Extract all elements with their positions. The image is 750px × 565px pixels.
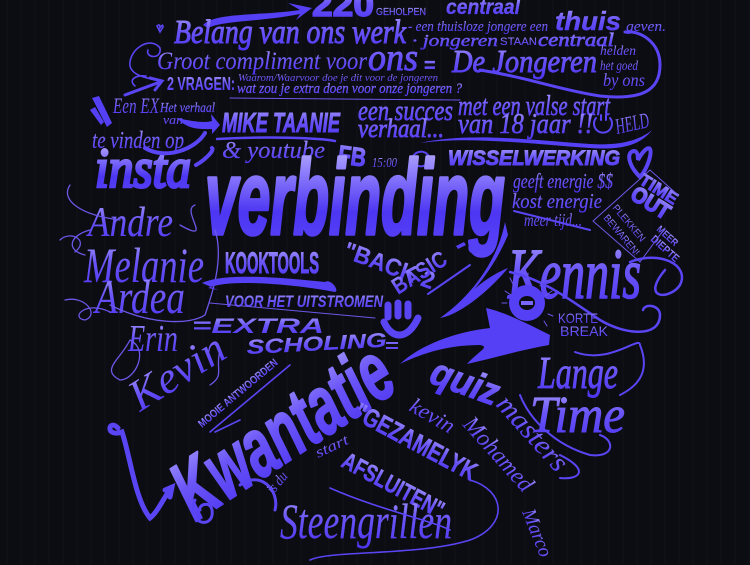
basic: BASIC [387, 245, 452, 299]
word cloud: centre tools [192, 247, 399, 359]
meer diepte: MEER [654, 224, 680, 249]
sun face [509, 285, 545, 321]
heart and swirl left [130, 25, 163, 86]
helden: helden [600, 44, 636, 59]
kevin small: kevin [406, 393, 460, 438]
mooie antwoorden: MOOIE ANTWOORDEN [196, 357, 281, 430]
word cloud: right section [340, 169, 682, 364]
mike taanie: MIKE TAANIE [222, 107, 341, 138]
andre: Andre [85, 200, 173, 246]
quiz: quiz [425, 351, 505, 414]
een succes: een succes [358, 96, 453, 127]
waarom: Waarom/Waarvoor doe je dit voor de jongeren [238, 72, 438, 84]
name flourishes [60, 185, 220, 385]
diepte: DIEPTE [648, 233, 681, 265]
voor het uitstromen: VOOR HET UITSTROMEN [225, 292, 384, 311]
closing loop [310, 480, 498, 560]
geeft energie: geeft energie $$ [513, 169, 613, 193]
scholing: SCHOLING [246, 330, 387, 359]
kevin: Kevin [118, 323, 234, 421]
theengrillen: Steengrillen [280, 493, 452, 549]
korte: KORTE [558, 310, 598, 326]
geholpen: GEHOLPEN [376, 7, 426, 18]
quote and arrow to 2 vragen [125, 78, 162, 95]
smile [594, 115, 612, 133]
divider [210, 303, 375, 318]
jongeren: · jongeren [412, 31, 498, 50]
extra equals: =EXTRA [192, 315, 324, 338]
headset [413, 152, 429, 166]
mohamed: Mohamed [457, 411, 539, 498]
line basic [428, 265, 470, 294]
melanie: Melanie [83, 237, 204, 293]
big quote marks [90, 96, 112, 127]
quote after basic [456, 242, 480, 254]
de jongeren: De Jongeren [451, 43, 597, 79]
sun icon [502, 273, 553, 326]
time out frame [593, 170, 678, 262]
kennis swash [510, 258, 682, 332]
word cloud: bottom section [110, 325, 644, 560]
marco: Marco [517, 505, 556, 560]
bewaren: BEWAREN! [601, 213, 641, 258]
kennis: Kennis [507, 234, 641, 314]
centraal line: centraal [538, 30, 614, 51]
plekken bewaren: PLEKKEN [610, 203, 647, 244]
erin: Erin [127, 318, 178, 360]
wat zou je extra doen: wat zou je extra doen voor onze jongeren ? [237, 81, 462, 97]
het verhaal: Het verhaal [159, 101, 215, 116]
out: OUT [626, 181, 676, 225]
back 2: "BACK 2 [340, 237, 438, 295]
is du: is du [264, 469, 291, 498]
equals: = [424, 55, 436, 77]
geven: geven. [626, 19, 666, 35]
groot compliment voor: Groot compliment voor [157, 48, 367, 75]
arrow to mike [177, 114, 220, 134]
time 15:00: 15:00 [372, 156, 397, 171]
held: HELD [612, 107, 651, 139]
arda: Ardea [93, 271, 185, 324]
time: Time [530, 387, 625, 444]
word cloud: middle band [90, 91, 652, 200]
big arrow [400, 308, 550, 364]
masters: masters [490, 389, 574, 478]
line over kennis [514, 211, 590, 230]
youtube: & youtube [222, 138, 325, 164]
staan: STAAN [500, 36, 537, 48]
verhaal: verhaal... [358, 114, 444, 143]
van 18 jaar: van 18 jaar !! [458, 109, 593, 140]
g tail [440, 222, 508, 318]
smile group [384, 303, 418, 335]
heart right [629, 148, 651, 177]
van: van [163, 112, 183, 127]
line under mooie [210, 365, 290, 432]
ons: ons [368, 37, 418, 79]
divider [230, 98, 460, 100]
main word kwantatie: Kwantatie [154, 325, 410, 537]
start: start [313, 432, 352, 462]
fb: FB [336, 139, 368, 173]
kost energie: kost energie [512, 189, 602, 213]
lange time flourishes [520, 343, 644, 478]
meer tijd: meer tijd... [524, 210, 582, 230]
swoosh from insta [145, 133, 213, 165]
een thuisloze jongere: - een thuisloze jongere een [408, 19, 548, 35]
word cloud: top section [125, 0, 666, 100]
by ons: by ons [603, 70, 645, 90]
swirl under kwantatie [193, 480, 276, 522]
arrow swoosh top [203, 3, 312, 28]
time out: TIME [636, 170, 682, 209]
thuis: thuis [555, 6, 621, 36]
het goed: het goed [600, 59, 639, 74]
insta: insta [95, 138, 191, 200]
een ex: Een EX [112, 93, 160, 118]
equals: = [385, 336, 399, 356]
word cloud: centre tools: KOOKTOOLS [225, 247, 319, 280]
belang van ons werk: Belang van ons werk [174, 14, 407, 51]
main word verbinding [205, 139, 508, 318]
k loop [110, 425, 172, 518]
swash kooktools [202, 277, 336, 292]
line under mike [217, 138, 335, 141]
lange: Lange [537, 347, 618, 398]
word cloud: left names [60, 185, 234, 421]
2 vragen: 2 VRAGEN: [167, 74, 235, 94]
afsluiten: AFSLUITEN" [337, 447, 449, 524]
met een valse start: met een valse start [458, 91, 611, 122]
verbinding text: verbinding [205, 139, 505, 257]
break: BREAK [560, 323, 609, 339]
swash beneath jongeren [480, 32, 660, 97]
te vinden op: te vinden op [92, 128, 184, 154]
gezamelyk: "GEZAMELYK [349, 397, 483, 487]
long wave line [420, 130, 652, 148]
wisselwerking: WISSELWERKING [448, 147, 620, 170]
